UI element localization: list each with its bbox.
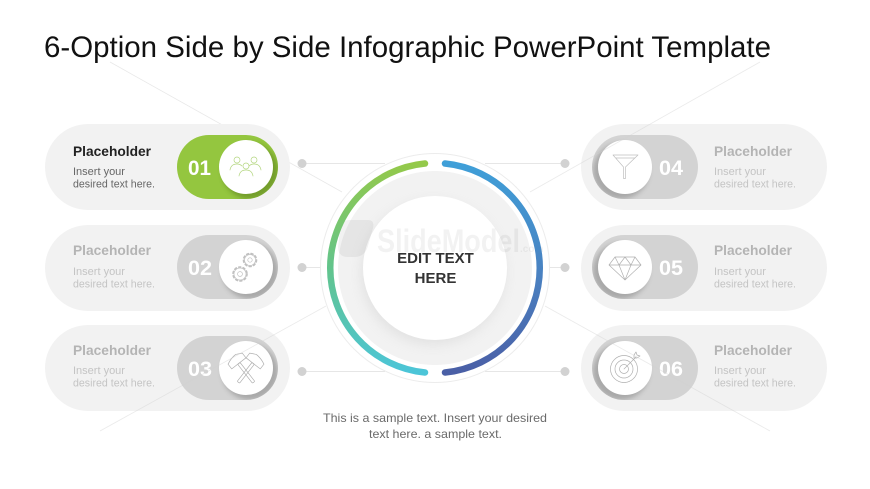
icon: people xyxy=(230,157,261,176)
center ring diagram xyxy=(320,154,550,382)
option 03 badge xyxy=(177,336,278,400)
option 05 text: desired text here. xyxy=(714,278,796,290)
option 02 badge xyxy=(177,235,278,299)
option 03 text: desired text here. xyxy=(73,378,155,390)
background diagonal lines xyxy=(100,62,770,431)
option 01 heading: Placeholder xyxy=(73,143,152,159)
icon: target xyxy=(610,352,640,382)
option 06 text: Insert your xyxy=(714,365,766,377)
option 02 badge: 02 xyxy=(188,257,212,280)
watermark: SlideModel xyxy=(377,223,520,259)
center label: EDIT TEXT xyxy=(397,250,474,267)
option 04 badge: 04 xyxy=(659,157,683,180)
watermark: .com xyxy=(520,244,543,255)
panel: option 04 xyxy=(581,124,827,210)
option 06 badge xyxy=(592,336,698,400)
icon: diamond xyxy=(609,257,641,280)
sample caption: text here. a sample text. xyxy=(369,427,502,441)
option 01 badge: 01 xyxy=(188,157,211,180)
option 02 heading: Placeholder xyxy=(73,242,152,258)
connector dots and lines xyxy=(298,159,570,376)
title: 6-Option Side by Side Infographic PowerPoint Template xyxy=(44,31,771,64)
sample caption: This is a sample text. Insert your desired xyxy=(323,411,547,425)
option 05 heading: Placeholder xyxy=(714,242,793,258)
panel: option 01 xyxy=(45,124,290,210)
panel: option 05 xyxy=(581,225,827,311)
panel: option 06 xyxy=(581,325,827,411)
center label: HERE xyxy=(415,270,456,287)
option 05 text: Insert your xyxy=(714,266,766,278)
arc: green to cyan xyxy=(330,164,425,372)
option 02 text: Insert your xyxy=(73,266,125,278)
option 01 text: desired text here. xyxy=(73,178,155,190)
option 04 text: Insert your xyxy=(714,166,766,178)
panel: option 02 xyxy=(45,225,290,311)
option 03 badge: 03 xyxy=(188,358,212,381)
option 04 heading: Placeholder xyxy=(714,143,793,159)
panel: option 03 xyxy=(45,325,290,411)
option 06 badge: 06 xyxy=(659,358,683,381)
option 06 heading: Placeholder xyxy=(714,342,793,358)
arc: blue to indigo xyxy=(445,164,540,372)
option 06 text: desired text here. xyxy=(714,378,796,390)
icon: funnel xyxy=(613,155,638,178)
option 04 text: desired text here. xyxy=(714,178,796,190)
icon: crossed hammers xyxy=(226,351,266,388)
option 02 text: desired text here. xyxy=(73,278,155,290)
icon: gears xyxy=(233,254,256,281)
option 03 text: Insert your xyxy=(73,365,125,377)
option 05 badge: 05 xyxy=(659,257,683,280)
background diagonal line: top left xyxy=(110,62,342,192)
option 05 badge xyxy=(592,235,698,299)
option 04 badge xyxy=(592,135,698,199)
option 01 badge xyxy=(177,135,278,199)
option 03 heading: Placeholder xyxy=(73,342,152,358)
option 01 text: Insert your xyxy=(73,166,125,178)
